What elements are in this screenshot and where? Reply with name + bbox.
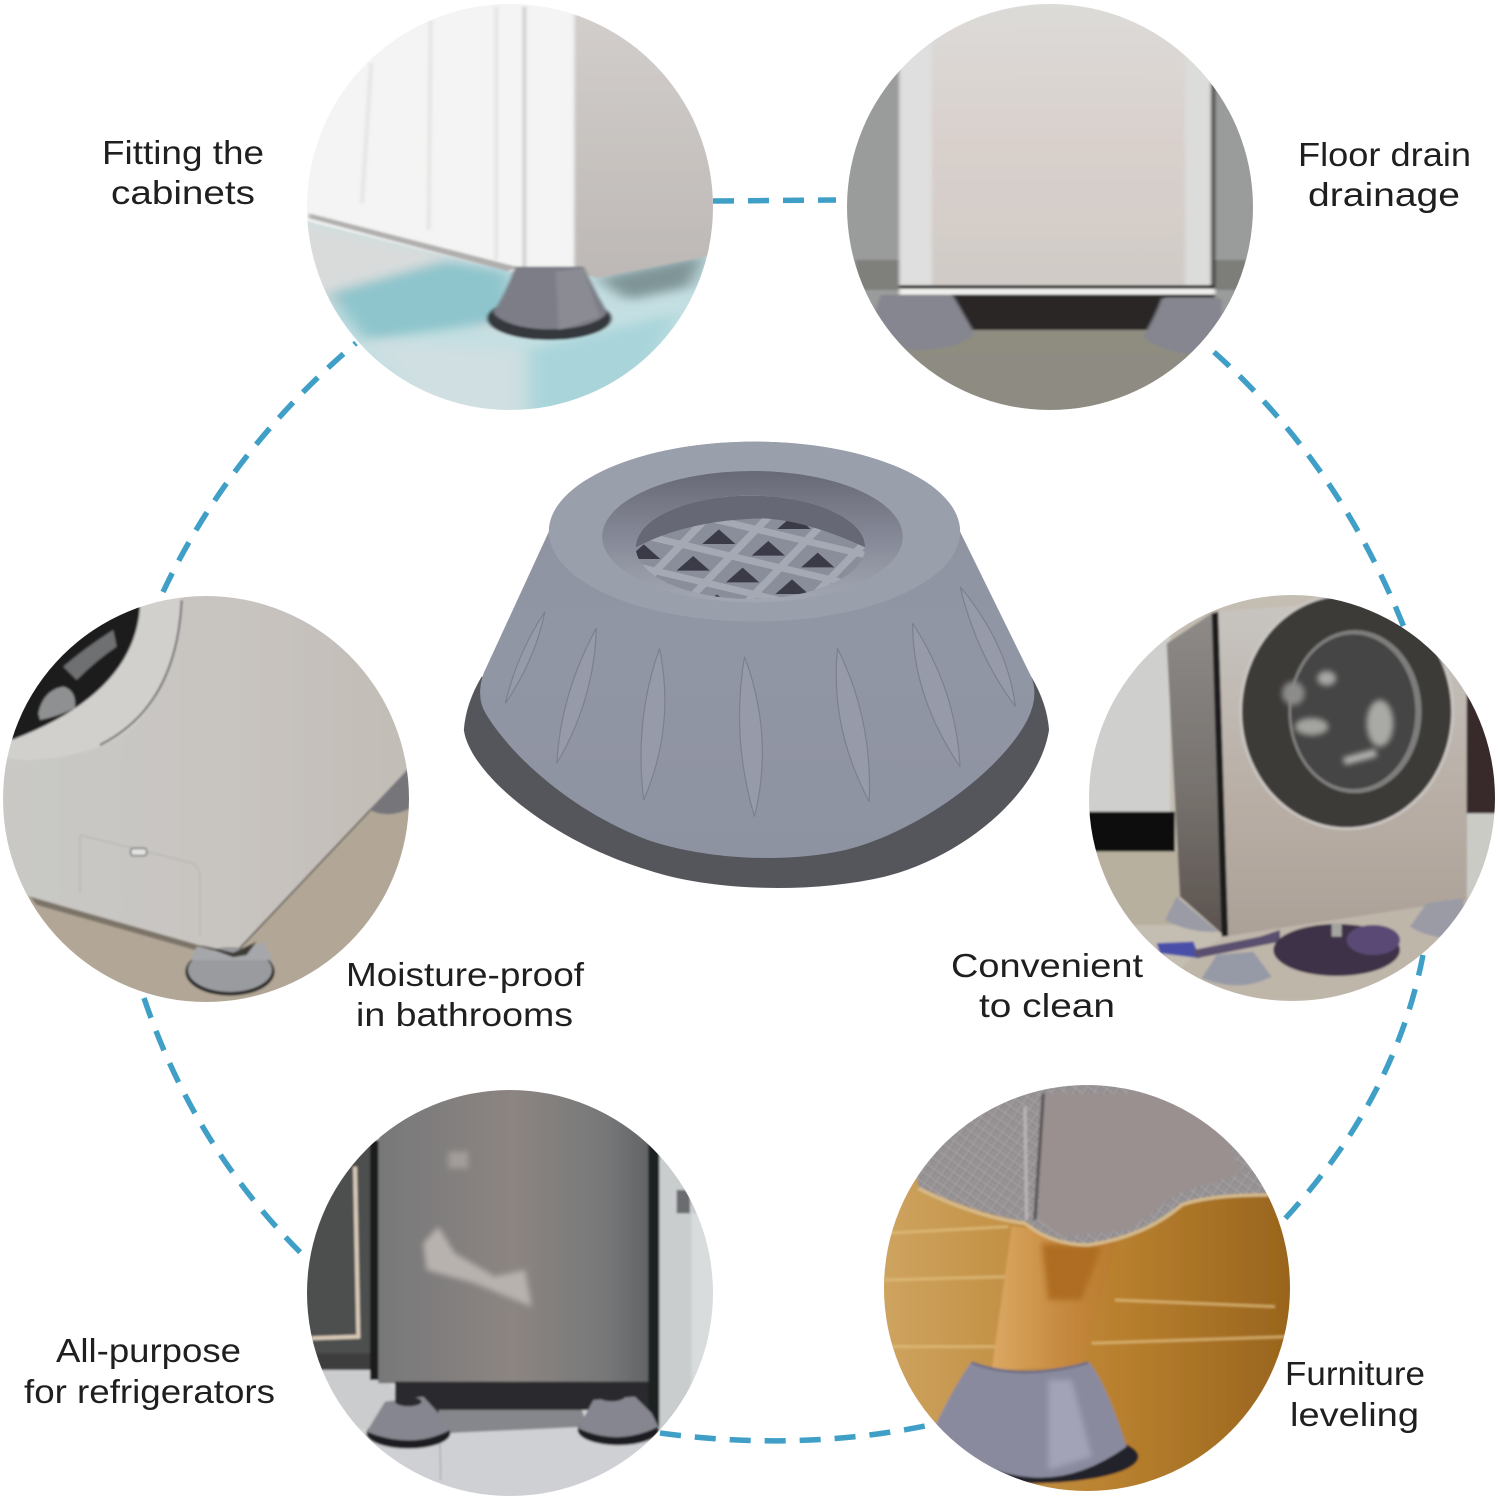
label: floor drain drainage: drainage [1308, 176, 1460, 213]
photo circle: moisture-proof in bathrooms [0, 590, 420, 1010]
label: convenient to clean: Convenient [951, 947, 1143, 984]
photo circle: all-purpose for refrigerators [295, 1080, 725, 1500]
label: all-purpose for refrigerators: for refrigerators [24, 1373, 275, 1410]
pad vertical ribs [505, 587, 1015, 817]
label: fitting the cabinets: Fitting the [102, 134, 264, 171]
photo circle: convenient to clean [1080, 590, 1500, 1010]
photo circle: furniture leveling [875, 1080, 1305, 1500]
label: convenient to clean: to clean [979, 987, 1115, 1024]
label: fitting the cabinets: cabinets [111, 174, 255, 211]
photo circle: floor drain drainage [847, 4, 1253, 410]
label: furniture leveling: Furniture [1285, 1355, 1425, 1392]
label: all-purpose for refrigerators: All-purpose [56, 1332, 241, 1369]
pad mesh grid [636, 496, 865, 599]
pad dark rubber base [464, 677, 1049, 888]
label: moisture-proof in bathrooms: Moisture-proof [346, 956, 585, 993]
pad grey body [480, 442, 1034, 858]
pad top rim [549, 442, 960, 622]
label: furniture leveling: leveling [1290, 1396, 1419, 1433]
label: floor drain drainage: Floor drain [1298, 136, 1471, 173]
central product: anti-vibration pad [432, 426, 1049, 888]
dashed connecting ring [144, 200, 1423, 1441]
photo circle: fitting the cabinets [307, 4, 713, 410]
pad recessed collar [602, 471, 903, 602]
label: moisture-proof in bathrooms: in bathrooms [356, 996, 573, 1033]
